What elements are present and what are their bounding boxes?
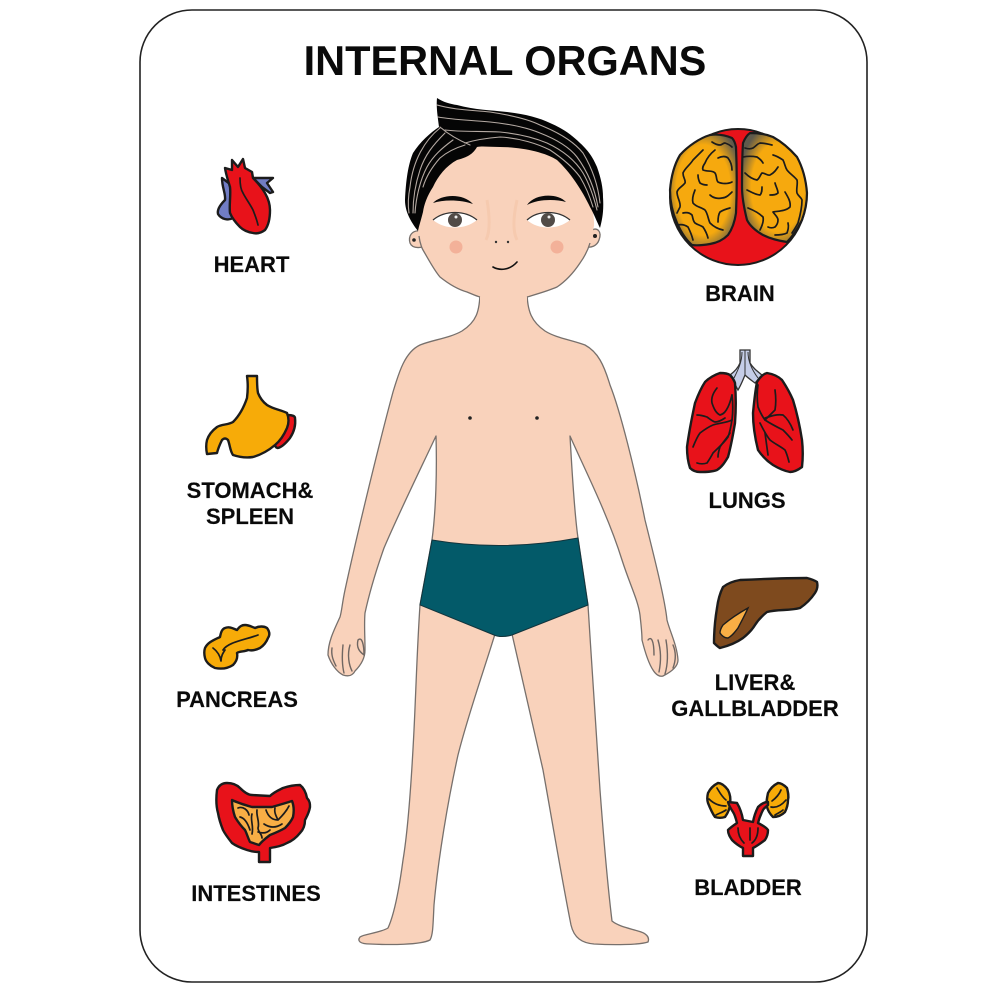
organ: stomach and spleen [206,376,295,457]
large intestine [216,783,310,862]
head [405,98,603,305]
ears [409,231,423,248]
label: pancreas: PANCREAS [176,687,298,712]
organ: brain [670,129,807,265]
nose [495,241,509,243]
organ: liver and gallbladder [714,578,817,648]
face [418,140,594,305]
nose shading [486,200,517,240]
label: intestines: INTESTINES [191,881,321,906]
label: liver and gallbladder: GALLBLADDER [671,696,839,721]
right hemisphere [742,133,807,242]
heart body [225,159,270,233]
small intestine [232,800,294,845]
title: INTERNAL ORGANS [304,37,706,84]
card panel [140,10,867,982]
right kidney [767,783,788,817]
label: bladder: BLADDER [694,875,802,900]
cheeks [450,240,564,254]
gallbladder [720,608,748,638]
left lung [687,373,736,472]
organ: pancreas [204,625,269,669]
brain base [670,129,806,265]
underwear [420,538,588,636]
ureters and bladder body [728,802,768,856]
organ: heart [218,159,273,233]
mouth [493,262,517,269]
liver [714,578,817,648]
trachea [730,350,762,390]
label: brain: BRAIN [705,281,775,306]
label: heart: HEART [214,252,290,277]
stomach [206,376,288,457]
organ: lungs [687,350,803,472]
label: liver and gallbladder: LIVER& [715,670,795,695]
boy figure [328,98,678,945]
label: lungs: LUNGS [708,488,786,513]
right lung [753,373,803,472]
right hand fingers [648,639,675,674]
lung veins [693,385,793,464]
nipples [468,416,539,420]
organ: bladder [707,783,788,856]
left hand fingers [332,639,364,673]
label: stomach and spleen: STOMACH& [187,478,313,503]
intestine folds [238,806,289,838]
eyebrows [433,196,566,205]
jaw outline [419,236,590,297]
hair [405,98,603,231]
eyes [433,212,570,228]
brain folds [677,142,802,240]
hair strands [408,105,600,213]
left hemisphere [670,135,737,245]
label: stomach and spleen: SPLEEN [206,504,294,529]
left kidney [707,783,730,818]
heart vessels [218,178,238,219]
body [328,290,678,945]
spleen [275,415,295,448]
organ: intestines [216,783,310,862]
